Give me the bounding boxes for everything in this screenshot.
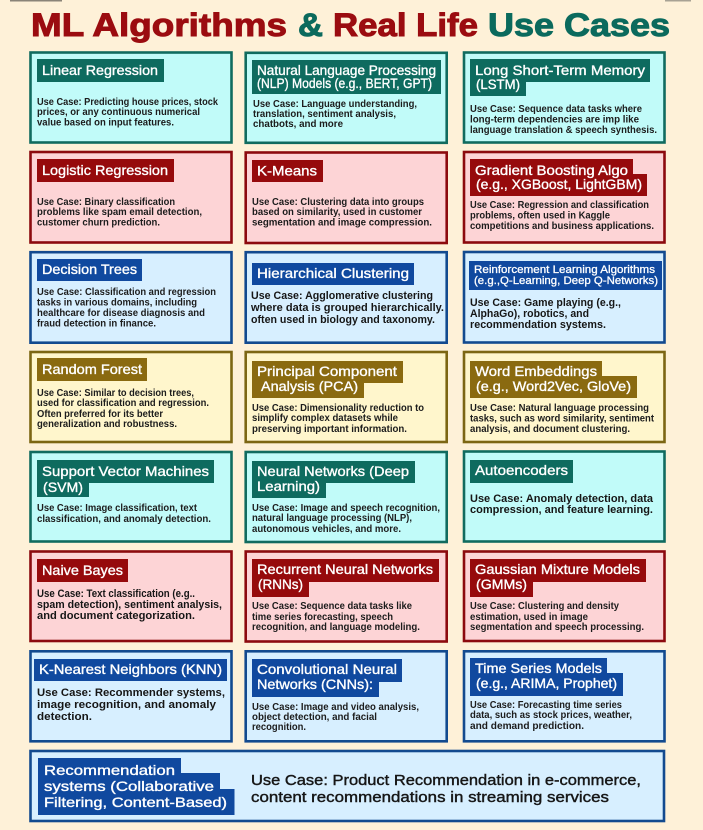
- title: Use Cases: [488, 7, 670, 43]
- panel: Hierarchical Clustering: [246, 252, 447, 343]
- heading: LSTM: [470, 59, 650, 96]
- heading: Gradient Boosting: Gradient Boosting Algo: [475, 163, 628, 178]
- panel: Logistic Regression: [30, 152, 232, 242]
- heading: Time Series Models: (e.g., ARIMA, Prophet): [476, 676, 617, 691]
- text: Recommendation use case: content recommendations in streaming services: [251, 790, 609, 806]
- text: LSTM use case: Use Case: Sequence data tasks where: [470, 104, 643, 115]
- heading: K-Means: K-Means: [257, 164, 317, 178]
- heading: GMMs: Gaussian Mixture Models: [475, 562, 640, 577]
- text: Linear Regression use case: prices, or any continuous numerical: [37, 107, 200, 118]
- text: Neural Networks use case: natural language processing (NLP),: [252, 513, 412, 524]
- text: SVM use case: [37, 503, 211, 525]
- text: KNN use case: detection.: [37, 711, 92, 723]
- text: NLP use case: translation, sentiment analysis,: [253, 109, 396, 120]
- text: Hierarchical Clustering use case: often used in biology and taxonomy.: [251, 314, 435, 326]
- heading: Linear Regression: Linear Regression: [42, 63, 158, 78]
- text: Random Forest use case: generalization and robustness.: [37, 419, 177, 430]
- panel: SVM: [30, 452, 232, 542]
- text: Hierarchical Clustering use case: where data is grouped hierarchically.: [250, 302, 444, 314]
- text: Random Forest use case: used for classification and regression.: [37, 398, 209, 409]
- panel: PCA: [246, 352, 447, 442]
- text: Word Embeddings use case: Use Case: Natural language processing: [470, 403, 649, 414]
- text: Decision Trees use case: [37, 287, 216, 330]
- heading: Recommendation systems: systems (Collaborative: [44, 779, 214, 794]
- heading: SVM: Support Vector Machines: [42, 464, 209, 479]
- heading: Reinforcement Learning: [469, 261, 662, 290]
- panel: Decision Trees: [30, 252, 232, 343]
- panel: Autoencoders: [464, 452, 664, 542]
- panel: Recommendation systems: [30, 751, 664, 821]
- heading: Naive Bayes: [37, 559, 128, 582]
- text: Autoencoders use case: Use Case: Anomaly detection, data: [470, 493, 653, 505]
- text: Time Series use case: and demand prediction.: [470, 721, 584, 732]
- text: Autoencoders use case: compression, and feature learning.: [470, 504, 653, 516]
- heading: K-Means: [252, 160, 323, 182]
- heading: Recommendation systems: Recommendation: [44, 763, 175, 778]
- text: PCA use case: [252, 403, 424, 435]
- heading: Gradient Boosting: [470, 159, 647, 196]
- panel: LSTM: [464, 52, 664, 142]
- text: Gradient Boosting use case: problems, often used in Kaggle: [470, 210, 611, 222]
- text: CNNs use case: object detection, and facial: [252, 712, 377, 723]
- text: SVM use case: Use Case: Image classification, text: [37, 503, 198, 514]
- text: Time Series use case: [470, 700, 632, 732]
- title: ML Algorithms: [31, 7, 287, 43]
- text: Linear Regression use case: [37, 97, 219, 128]
- panel: K-Means: [246, 152, 447, 243]
- text: LSTM use case: [470, 104, 657, 136]
- text: K-Means use case: Use Case: Clustering data into groups: [252, 197, 424, 208]
- heading: KNN: [34, 659, 227, 681]
- text: Random Forest use case: Often preferred for its better: [37, 409, 163, 420]
- text: PCA use case: preserving important information.: [252, 424, 407, 435]
- text: KNN use case: image recognition, and anomaly: [37, 699, 216, 711]
- text: RNNs use case: time series forecasting, speech: [252, 612, 393, 623]
- text: Time Series use case: Use Case: Forecasting time series: [470, 700, 622, 711]
- heading: Hierarchical Clustering: [252, 263, 414, 285]
- heading: NLP Models: Natural Language Processing: [257, 63, 436, 78]
- heading: Word Embeddings: (e.g., Word2Vec, GloVe): [476, 379, 631, 394]
- heading: Gradient Boosting: (e.g., XGBoost, LightGBM): [476, 177, 642, 192]
- text: Reinforcement Learning use case: Use Case: Game playing (e.g.,: [470, 297, 621, 309]
- heading: LSTM: (LSTM): [476, 77, 520, 92]
- heading: Neural Networks: [252, 461, 415, 498]
- text: Linear Regression use case: value based on input features.: [37, 118, 174, 128]
- panel: CNNs: [246, 651, 447, 741]
- panel: Naive Bayes: [30, 552, 232, 641]
- heading: Neural Networks: Learning): [257, 479, 320, 494]
- text: Autoencoders use case: [470, 493, 653, 516]
- text: Recommendation use case: [251, 773, 641, 806]
- text: Decision Trees use case: fraud detection in finance.: [37, 318, 156, 330]
- text: Reinforcement Learning use case: recommendation systems.: [470, 319, 606, 331]
- heading: Decision Trees: [37, 259, 142, 281]
- heading: Reinforcement Learning: (e.g.,Q-Learning, Deep Q-Networks): [474, 275, 658, 287]
- text: Decision Trees use case: tasks in various domains, including: [37, 298, 197, 308]
- heading: Logistic Regression: Logistic Regression: [42, 163, 168, 178]
- text: Random Forest use case: Use Case: Similar to decision trees,: [37, 388, 194, 399]
- panel: GMMs: [464, 552, 664, 641]
- panel: Linear Regression: [30, 52, 232, 142]
- heading: Random Forest: Random Forest: [42, 362, 142, 377]
- heading: LSTM: Long Short-Term Memory: [475, 63, 645, 78]
- text: Logistic Regression use case: problems like spam email detection,: [37, 207, 202, 218]
- heading: NLP Models: [252, 60, 441, 94]
- text: KNN use case: [37, 687, 225, 723]
- heading: Naive Bayes: Naive Bayes: [42, 563, 123, 578]
- text: Word Embeddings use case: [470, 403, 655, 435]
- text: Recommendation use case: Use Case: Product Recommendation in e-commerce,: [251, 773, 641, 789]
- heading: Decision Trees: Decision Trees: [42, 262, 137, 277]
- text: Hierarchical Clustering use case: Use Case: Agglomerative clustering: [251, 290, 433, 302]
- heading: CNNs: Networks (CNNs):: [257, 677, 373, 692]
- text: SVM use case: classification, and anomaly detection.: [37, 514, 211, 525]
- text: Decision Trees use case: Use Case: Classification and regression: [37, 287, 216, 298]
- text: K-Means use case: [252, 197, 432, 228]
- text: Neural Networks use case: [252, 503, 440, 535]
- text: LSTM use case: long-term dependencies are imp like: [470, 114, 640, 126]
- text: Hierarchical Clustering use case: [250, 290, 444, 326]
- text: Gradient Boosting use case: Use Case: Regression and classification: [470, 200, 649, 211]
- panel: RNNs: [246, 552, 447, 642]
- text: CNNs use case: [252, 702, 419, 733]
- heading: CNNs: [252, 659, 402, 697]
- text: RNNs use case: Use Case: Sequence data tasks like: [252, 601, 413, 612]
- text: Gradient Boosting use case: [470, 200, 654, 232]
- panel: Reinforcement Learning: [464, 252, 664, 342]
- text: PCA use case: Use Case: Dimensionality reduction to: [252, 403, 424, 414]
- text: GMMs use case: Use Case: Clustering and density: [470, 601, 620, 612]
- text: GMMs use case: estimation, used in image: [470, 612, 589, 623]
- panel: Neural Networks: [246, 452, 447, 542]
- text: NLP use case: [253, 99, 417, 130]
- text: Word Embeddings use case: analysis, and document clustering.: [470, 424, 630, 435]
- heading: RNNs: (RNNs): [258, 577, 303, 592]
- text: RNNs use case: recognition, and language modeling.: [252, 622, 420, 633]
- text: K-Means use case: segmentation and image compression.: [252, 218, 432, 228]
- heading: Neural Networks: Neural Networks (Deep: [257, 464, 409, 479]
- title: &: [298, 7, 323, 43]
- heading: SVM: [37, 460, 214, 497]
- text: NLP use case: Use Case: Language understanding,: [253, 99, 417, 110]
- text: GMMs use case: [470, 601, 644, 633]
- heading: KNN: K-Nearest Neighbors (KNN): [39, 662, 222, 677]
- text: Word Embeddings use case: tasks, such as word similarity, sentiment: [470, 414, 655, 424]
- heading: Logistic Regression: [37, 159, 174, 182]
- text: Random Forest use case: [37, 388, 209, 430]
- heading: CNNs: Convolutional Neural: [257, 662, 397, 677]
- panel: NLP Models: [246, 53, 447, 143]
- text: LSTM use case: language translation & speech synthesis.: [470, 125, 657, 136]
- text: Neural Networks use case: Use Case: Image and speech recognition,: [252, 503, 440, 514]
- text: PCA use case: simplify complex datasets while: [252, 413, 399, 424]
- panel: Word Embeddings: [464, 352, 664, 442]
- panel: Random Forest: [30, 352, 232, 442]
- heading: Recommendation systems: [38, 758, 234, 815]
- heading: Word Embeddings: Word Embeddings: [475, 364, 597, 379]
- heading: PCA: Analysis (PCA): [261, 379, 358, 394]
- heading: Reinforcement Learning: Reinforcement Learning Algorithms: [474, 264, 656, 276]
- heading: Word Embeddings: [470, 361, 637, 398]
- text: Linear Regression use case: Use Case: Predicting house prices, stock: [37, 97, 219, 108]
- text: CNNs use case: Use Case: Image and video analysis,: [252, 702, 419, 713]
- panel: KNN: [30, 651, 232, 741]
- heading: NLP Models: (NLP) Models (e.g., BERT, GPT): [257, 76, 432, 91]
- text: Reinforcement Learning use case: [470, 297, 621, 331]
- heading: Random Forest: [37, 358, 147, 381]
- heading: Time Series Models: [470, 658, 623, 696]
- text: Neural Networks use case: autonomous vehicles, and more.: [252, 524, 401, 535]
- text: Logistic Regression use case: [37, 197, 202, 228]
- text: Reinforcement Learning use case: AlphaGo), robotics, and: [470, 308, 589, 320]
- text: Naive Bayes use case: Use Case: Text classification (e.g..: [37, 588, 195, 600]
- panel: Time Series Models: [464, 651, 664, 741]
- text: Logistic Regression use case: Use Case: Binary classification: [37, 197, 175, 208]
- text: NLP use case: chatbots, and more: [253, 119, 344, 130]
- heading: PCA: [252, 361, 403, 398]
- heading: Time Series Models: Time Series Models: [475, 661, 602, 676]
- text: KNN use case: Use Case: Recommender systems,: [37, 687, 225, 699]
- text: Naive Bayes use case: [37, 588, 222, 622]
- text: Naive Bayes use case: spam detection), sentiment analysis,: [37, 599, 222, 611]
- heading: Linear Regression: [37, 59, 164, 82]
- text: K-Means use case: based on similarity, used in customer: [252, 207, 422, 218]
- text: CNNs use case: recognition.: [252, 722, 306, 733]
- text: RNNs use case: [252, 601, 420, 633]
- text: Time Series use case: data, such as stock prices, weather,: [470, 710, 632, 721]
- heading: RNNs: Recurrent Neural Networks: [257, 562, 433, 577]
- heading: Autoencoders: Autoencoders: [475, 463, 568, 478]
- text: Naive Bayes use case: and document categorization.: [37, 610, 195, 622]
- text: GMMs use case: segmentation and speech processing.: [470, 622, 644, 633]
- text: Decision Trees use case: healthcare for disease diagnosis and: [37, 308, 205, 319]
- heading: Hierarchical Clustering: Hierarchical Clustering: [257, 266, 409, 281]
- heading: GMMs: [470, 559, 646, 597]
- heading: RNNs: [252, 559, 439, 597]
- heading: Recommendation systems: Filtering, Content-Based): [44, 795, 227, 810]
- title: [31, 7, 670, 43]
- heading: GMMs: (GMMs): [476, 577, 527, 592]
- heading: PCA: Principal Component: [257, 364, 397, 379]
- text: Gradient Boosting use case: competitions and business applications.: [470, 221, 654, 232]
- text: Logistic Regression use case: customer churn prediction.: [37, 218, 160, 228]
- heading: SVM: (SVM): [43, 480, 83, 495]
- title: Real Life: [333, 7, 478, 43]
- panel: Gradient Boosting: [464, 152, 664, 242]
- heading: Autoencoders: [470, 460, 573, 483]
